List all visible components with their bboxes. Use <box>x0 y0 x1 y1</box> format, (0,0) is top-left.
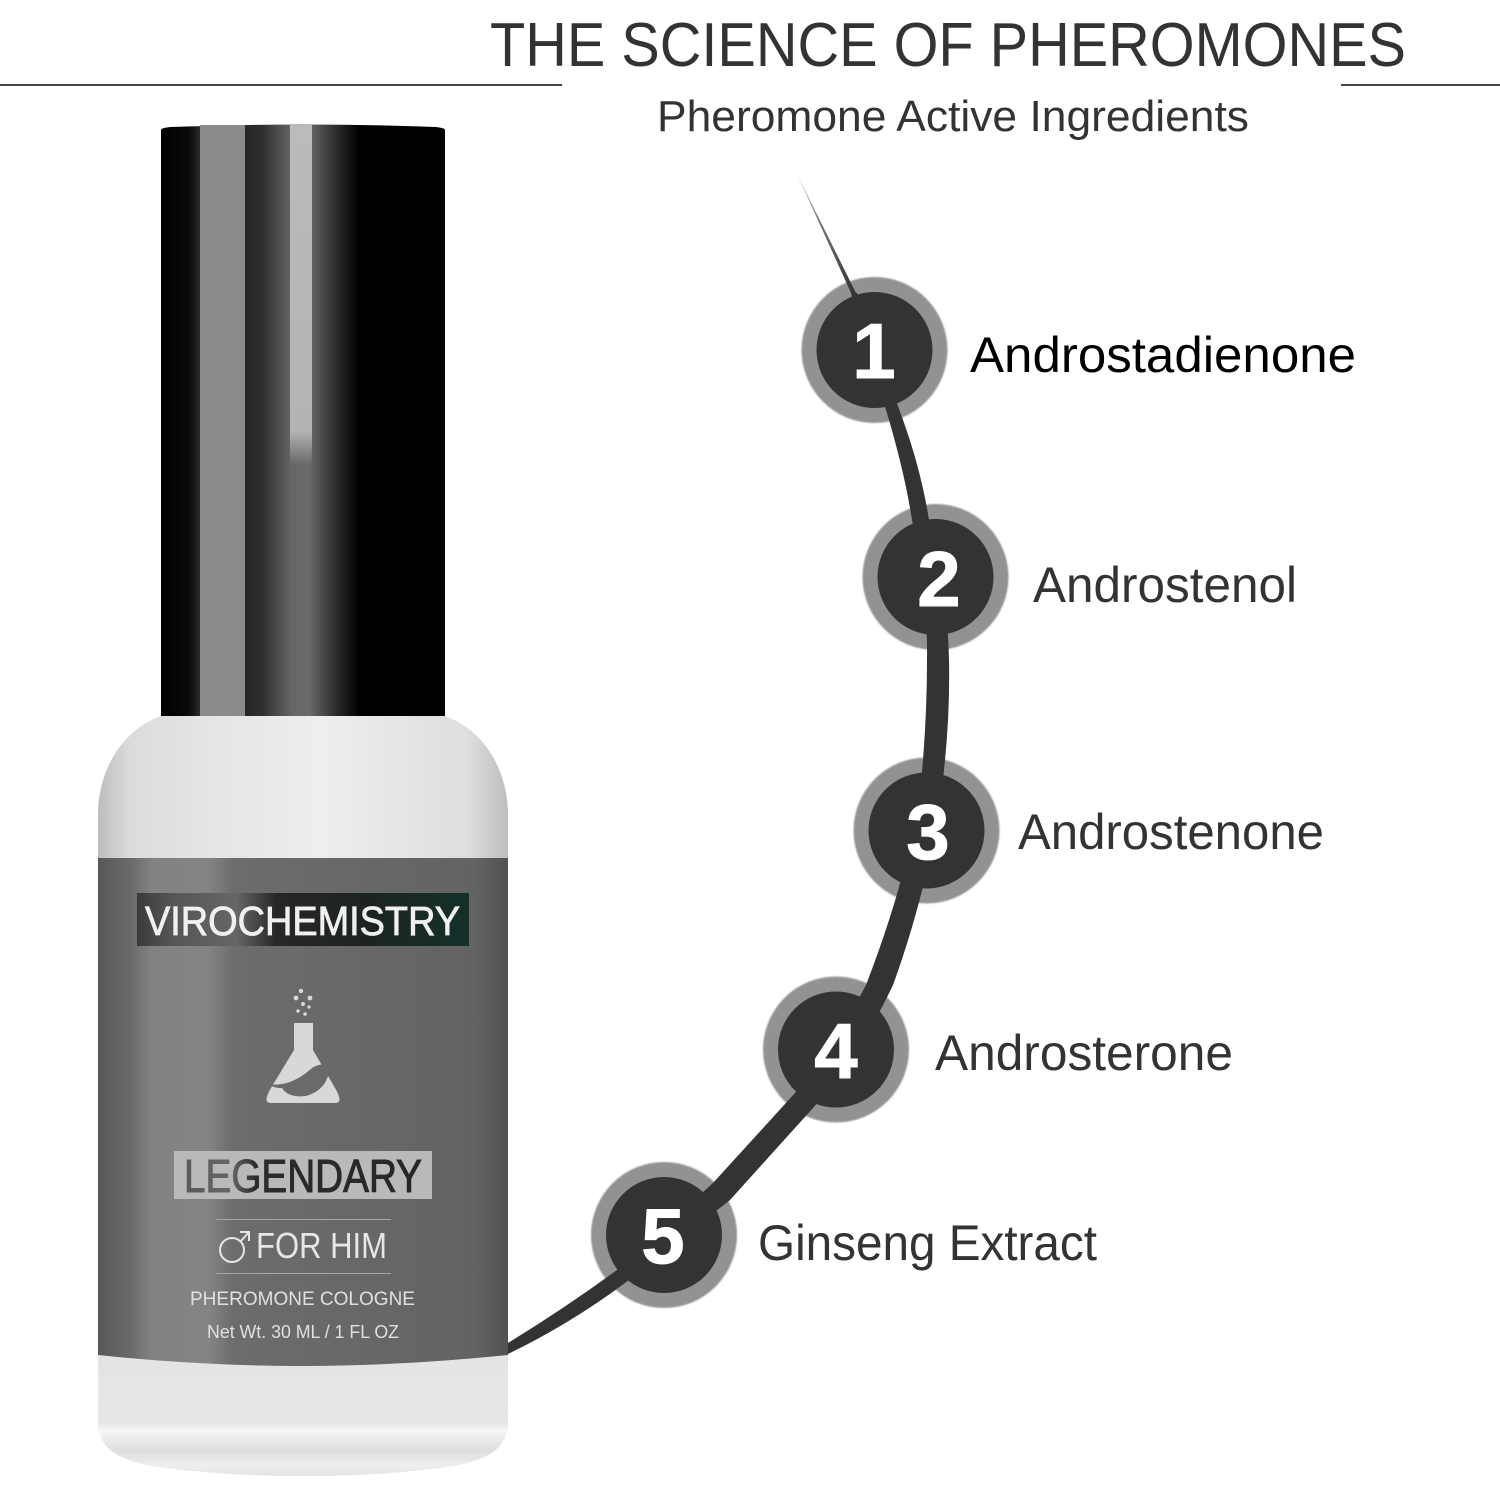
title: THE SCIENCE OF PHEROMONES <box>490 11 1406 80</box>
ring 3 <box>854 758 1000 904</box>
bottle base glass <box>98 1350 508 1476</box>
node 1: 1 <box>852 307 896 395</box>
timeline of ingredients <box>508 172 1008 1354</box>
icon: flask with leaf <box>265 989 340 1103</box>
node 1 <box>816 292 932 408</box>
subtitle: Pheromone Active Ingredients <box>657 92 1249 141</box>
bottle cap <box>161 124 445 716</box>
bottle label <box>98 858 508 1366</box>
ring 1 <box>802 277 948 423</box>
ring 2 <box>862 504 1008 650</box>
product name: LEGENDARY <box>184 1150 422 1202</box>
curved connector <box>508 293 949 1354</box>
title rule left <box>0 84 562 86</box>
node 5 <box>606 1177 722 1293</box>
ingredient 4 label: Androsterone <box>935 1025 1233 1081</box>
brand name: VIROCHEMISTRY <box>145 898 460 944</box>
product type: PHEROMONE COLOGNE <box>190 1289 415 1310</box>
cap highlight wide <box>200 125 245 716</box>
node 2 <box>878 519 994 635</box>
for him text: FOR HIM <box>256 1225 387 1266</box>
node 5: 5 <box>641 1192 685 1280</box>
label rule top <box>216 1219 391 1220</box>
icon: male symbol <box>220 1232 249 1262</box>
ring 4 <box>763 976 909 1122</box>
node 3 <box>868 772 984 888</box>
ingredient 1 label: Androstadienone <box>970 327 1356 383</box>
ingredient 5 label: Ginseng Extract <box>758 1215 1097 1271</box>
ring 5 <box>591 1162 737 1308</box>
node 4 <box>778 992 894 1108</box>
title rule right <box>1341 84 1500 86</box>
product bottle <box>98 124 508 1476</box>
ingredient 2 label: Androstenol <box>1033 557 1297 613</box>
ingredient 3 label: Androstenone <box>1018 804 1324 860</box>
thin line start <box>796 172 856 295</box>
label rule bottom <box>216 1273 391 1274</box>
bottle body <box>98 716 508 1476</box>
net weight: Net Wt. 30 ML / 1 FL OZ <box>207 1322 399 1342</box>
cap highlight narrow <box>290 125 312 465</box>
node 2: 2 <box>917 535 961 623</box>
node 3: 3 <box>906 788 950 876</box>
node 4: 4 <box>814 1007 858 1095</box>
